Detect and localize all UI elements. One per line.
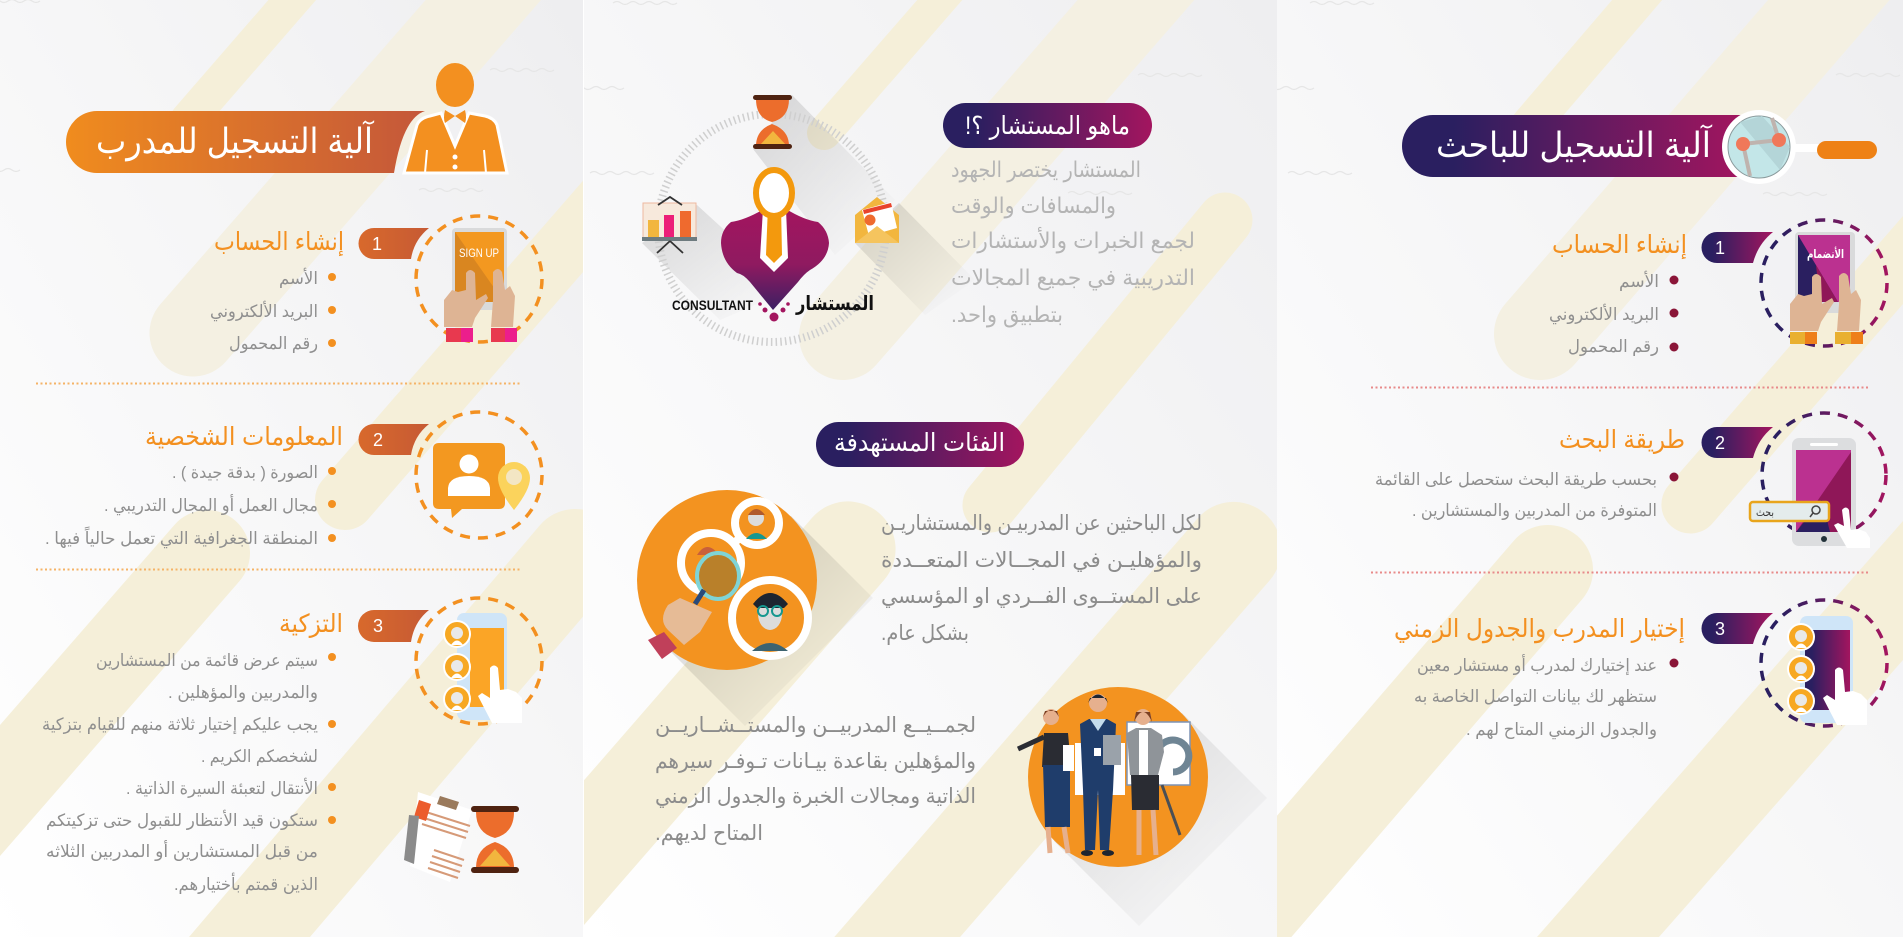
text: consultant definition: بتطبيق واحد. — [951, 302, 1063, 328]
step 3 list: والجدول الزمني المتاح لهم . — [1466, 720, 1657, 740]
text: consultant definition: والمسافات والوقت — [951, 193, 1116, 218]
text: consultant definition — [951, 157, 1195, 328]
step 3 list — [42, 651, 336, 895]
chart icon — [642, 197, 697, 253]
text: target group one: على المستــوى الفــردي او المؤسسي — [881, 585, 1202, 608]
panel: trainer registration — [0, 0, 583, 937]
step 2 list — [45, 463, 336, 549]
text: target group two: لجمــيــع المدربيــن والمستــشــاريــن — [655, 714, 976, 737]
text: consultant definition: التدريبية في جميع المجالات — [951, 265, 1195, 291]
icon: sign up phone — [416, 216, 542, 342]
badge 1: 1 — [372, 234, 382, 254]
long shadows — [642, 95, 954, 307]
text: target group one: بشكل عام. — [881, 622, 969, 645]
step 3 list: ستكون قيد الأنتظار للقبول حتى تزكيتكم — [46, 810, 318, 831]
step 3 list: يجب عليكم إختيار ثلاثة منهم للقيام بتزكية — [42, 715, 318, 735]
envelope icon — [855, 197, 899, 243]
step 1 list: رقم المحمول — [1568, 337, 1659, 357]
badge 1 — [1702, 232, 1773, 263]
step 3 list: الذين قمتم بأختيارهم. — [174, 872, 318, 895]
step 2: search method — [1375, 413, 1886, 548]
step 1 list: البريد الألكتروني — [1549, 304, 1659, 325]
text: consultant definition: لجمع الخبرات والأستشارات — [951, 227, 1195, 253]
step 2 list: بحسب طريقة البحث ستحصل على القائمة — [1375, 470, 1657, 489]
step 3 list: عند إختيارك لمدرب أو مستشار معين — [1417, 654, 1657, 675]
step 3 list — [1414, 654, 1678, 740]
step 1 list — [210, 268, 336, 354]
icon: professionals circle — [1018, 687, 1267, 926]
step 1 heading: إنشاء الحساب — [1552, 231, 1687, 260]
heading: what is the consultant: ماهو المستشار ؟! — [965, 112, 1130, 140]
step 1: create account — [1549, 220, 1887, 357]
badge 3 — [358, 610, 429, 642]
logo text: CONSULTANT — [672, 297, 753, 313]
step 1 list: الأسم — [1619, 271, 1659, 292]
text: target group two: الذاتية ومجالات الخبرة والجدول الزمني — [655, 785, 976, 808]
step 3 heading: إختيار المدرب والجدول الزمني — [1394, 615, 1685, 644]
step 1 list: البريد الألكتروني — [210, 301, 318, 322]
icon: magnifier with map — [1722, 110, 1877, 184]
step 3 list: من قبل المستشارين أو المدربين الثلاثه — [46, 840, 318, 861]
step 2 heading: طريقة البحث — [1559, 426, 1685, 454]
consultant figure — [721, 170, 829, 310]
logo text: المستشار — [795, 293, 874, 315]
step 2 list: المتوفرة من المدربين والمستشارين . — [1412, 501, 1657, 520]
step 2 list: مجال العمل أو المجال التدريبي . — [104, 494, 318, 516]
step 1 list — [1549, 271, 1678, 357]
heading: what is the consultant — [943, 103, 1152, 148]
step 3 heading: التزكية — [279, 610, 343, 638]
step 1 list: رقم المحمول — [229, 334, 318, 354]
step 3 list: سيتم عرض قائمة من المستشارين — [96, 651, 318, 671]
text: target group one: لكل الباحثين عن المدربيـن والمستشاريـن — [881, 512, 1202, 535]
badge 2: 2 — [373, 430, 383, 450]
step 3 list: الأنتقال لتعبئة السيرة الذاتية . — [126, 778, 318, 798]
step 2 list: الصورة ( بدقة جيدة ) . — [172, 463, 318, 482]
icon: phone with avatars — [1761, 600, 1887, 726]
heading: researcher header — [1402, 115, 1745, 177]
panel: what is a consultant and target groups — [560, 0, 1281, 937]
step 2: personal information — [45, 412, 542, 549]
icon: searchers circle — [637, 490, 873, 726]
icon: profile card and pin — [416, 412, 542, 538]
heading: target groups — [816, 422, 1024, 467]
text: target group two: والمؤهلين بقاعدة بيـانات تـوفـر سيرهم — [655, 750, 976, 774]
step 3: recommendation — [42, 598, 542, 895]
badge 2: 2 — [1715, 433, 1725, 453]
step 3 list: لشخصكم الكريم . — [201, 747, 318, 767]
text: consultant definition: المستشار يختصر الجهود — [951, 157, 1141, 182]
text: target group two: المتاح لديهم. — [655, 822, 763, 846]
icon: join phone — [1761, 220, 1887, 346]
badge 3 — [1702, 613, 1773, 644]
heading: trainer header — [66, 111, 425, 173]
icon: sign up phone: SIGN UP — [459, 246, 499, 260]
badge 1: 1 — [1715, 238, 1725, 258]
badge 2 — [358, 424, 429, 455]
icon: consultant dial — [642, 95, 975, 342]
badge 2 — [1702, 427, 1773, 458]
heading: researcher header: آلية التسجيل للباحث — [1436, 123, 1713, 165]
text: target group two — [655, 714, 976, 846]
badge 3: 3 — [1715, 619, 1725, 639]
icon: trainer person — [404, 63, 507, 173]
step 3 list: والمدربين والمؤهلين . — [168, 683, 318, 702]
icon: CV papers and hourglass — [404, 792, 519, 882]
man — [1080, 694, 1121, 856]
step 1 heading: إنشاء الحساب — [214, 228, 344, 257]
icon: join phone: الأنضمام — [1807, 246, 1844, 262]
step 3: choose trainer and schedule — [1394, 600, 1887, 740]
step 1 list: الأسم — [279, 268, 318, 289]
badge 3: 3 — [373, 616, 383, 636]
text: target group one: والمؤهليـن في المجــالات المتعــددة — [881, 549, 1202, 572]
heading: target groups: الفئات المستهدفة — [834, 429, 1005, 458]
step 3 list: ستظهر لك بيانات التواصل الخاصة به — [1414, 687, 1657, 707]
icon: search phone — [1750, 413, 1886, 548]
icon: phone with avatars — [416, 598, 542, 724]
logo text — [672, 293, 874, 322]
panel: researcher registration — [1250, 0, 1903, 937]
badge 1 — [358, 228, 429, 259]
icon: search phone: بحث — [1756, 507, 1774, 519]
step 2 heading: المعلومات الشخصية — [145, 423, 343, 451]
hourglass — [753, 95, 792, 149]
text: target group one — [881, 512, 1202, 645]
right woman — [1127, 709, 1164, 855]
step 2 list — [1375, 470, 1678, 520]
left woman — [1018, 709, 1074, 853]
step 2 list: المنطقة الجغرافية التي تعمل حالياً فيها . — [45, 525, 318, 549]
step 1: create account — [210, 216, 542, 354]
heading: trainer header: آلية التسجيل للمدرب — [96, 119, 375, 162]
